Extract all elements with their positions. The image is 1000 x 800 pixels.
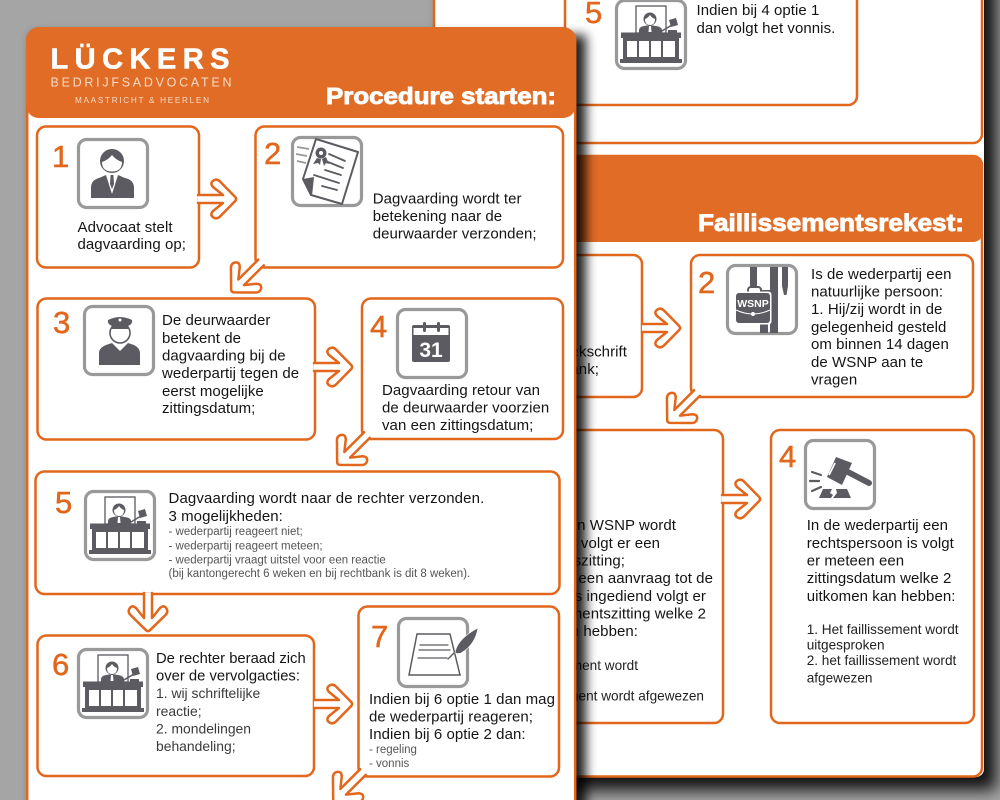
box: rekest step 3: is ingediend volgt er (571, 588, 706, 605)
box: step 7: - regeling (369, 744, 417, 756)
box: step 7 (358, 606, 559, 776)
box: step 5: (bij kantongerecht 6 weken en bij rechtbank is dit 8 weken). (168, 568, 470, 580)
box: step 5: - wederpartij reageert niet; (168, 526, 303, 538)
arrow: 2 to 3 (218, 249, 275, 305)
box: rekest step 2: 1. Hij/zij wordt in de (811, 301, 942, 318)
icon: WSNP briefcase: WSNP (737, 298, 769, 310)
back sheet (433, 0, 984, 777)
icon: gavel (806, 440, 874, 508)
box: step 5: - wederpartij reageert meteen; (168, 540, 323, 552)
box: step 7: Indien bij 6 optie 1 dan mag (369, 691, 555, 708)
box: rekest step 4: 2. het faillissement wordt (807, 653, 957, 668)
box: step 2: deurwaarder verzonden; (373, 225, 537, 242)
icon: judge at bench (616, 0, 686, 68)
box: step 6 (38, 636, 314, 776)
heading: Procedure starten: Procedure starten: (326, 83, 556, 109)
arrow: 3 to 4 (314, 348, 352, 386)
box: step 6: over de vervolgacties: (156, 669, 300, 685)
box: step 6: reactie; (156, 703, 202, 719)
icon: WSNP briefcase (728, 266, 796, 334)
arrow: 7 to next (320, 758, 377, 800)
box: step 5: - wederpartij vraagt uitstel voor een reactie (168, 554, 386, 566)
box: rekest step 4: rechtspersoon is volgt (807, 535, 955, 552)
icon: document with seal (292, 138, 362, 206)
box: step 4: de deurwaarder voorzien (382, 400, 549, 417)
box: step 5: Dagvaarding wordt naar de rechter verzonden. (168, 490, 484, 507)
logo: LÜCKERS (50, 42, 230, 75)
box: rekest step 2: de WSNP aan te (811, 354, 923, 371)
box: step 5: 3 mogelijkheden: (168, 508, 283, 525)
box: step 3: zittingsdatum; (162, 400, 255, 417)
box: step 7: Indien bij 6 optie 2 dan: (369, 726, 526, 743)
box: rekest step 4: uitgesproken (807, 638, 885, 652)
box: step 4: Dagvaarding retour van (382, 382, 540, 399)
arrow: rekest 1 to 2 (642, 309, 680, 347)
box: rekest step 4 (771, 430, 974, 723)
box: rekest step 2: Is de wederpartij een (811, 266, 952, 283)
box: rekest step 3: volgt er een (581, 535, 660, 552)
box: step 6: De rechter beraad zich (156, 651, 306, 667)
box: rekest step 3: een aanvraag tot de (578, 570, 713, 587)
box: rekest step 4: 4 (779, 439, 796, 474)
box: rekest step 1: verzoekschrift (534, 344, 628, 360)
box: step 3: 3 (53, 305, 70, 340)
box: rekest step 2: gelegenheid gesteld (811, 319, 946, 336)
box: step 3: dagvaarding bij de (162, 348, 286, 364)
logo (50, 42, 232, 105)
header band (433, 155, 983, 242)
icon: lawyer (78, 140, 148, 208)
box: step 2: 2 (264, 136, 281, 171)
arrow: rekest 3 to 4 (722, 480, 760, 518)
box: rekest step 3: een WSNP wordt (560, 517, 677, 534)
box: rekest step 1 (470, 255, 642, 397)
box: rekest step 2: 2 (698, 265, 715, 300)
arrow: 6 to 7 (314, 685, 352, 723)
box: rekest step 4: er meteen een (807, 552, 904, 570)
box: step 6: behandeling; (156, 738, 236, 754)
box: step 6: 6 (52, 647, 69, 682)
panel: faillissementsrekest card (433, 155, 983, 776)
icon: calendar (398, 310, 466, 378)
box: step 4: van een zittingsdatum; (382, 417, 533, 434)
box: step 3 (38, 298, 315, 440)
box: step 4: 4 (370, 309, 387, 344)
box: step 7: de wederpartij reageren; (369, 709, 533, 726)
box: step 3: eerst mogelijke (162, 383, 264, 400)
icon: paper and quill (398, 618, 478, 686)
icon: bailiff (84, 306, 154, 374)
panel: procedure starten sheet (26, 27, 576, 800)
box: rekest step 3: 2. het faillissement wordt afgewezen (485, 689, 704, 704)
box: step 6: 1. wij schriftelijke (156, 685, 260, 701)
box: rekest step 1: rechtbank; (528, 361, 599, 378)
box: rekest step 2: om binnen 14 dagen (811, 336, 949, 353)
box: step 2 (256, 126, 563, 268)
icon: judge at bench (78, 650, 148, 718)
sheet shadow: front sheet (33, 35, 586, 800)
box: step 4 (362, 298, 563, 439)
box: step 5 (36, 472, 560, 594)
arrow: 4 to 5 (324, 421, 381, 478)
box: step 1: dagvaarding op; (78, 236, 186, 253)
logo: MAASTRICHT & HEERLEN (75, 96, 209, 105)
box: step 2: betekening naar de (373, 208, 502, 225)
box: rekest step 3: faillissementszitting welke 2 (520, 606, 706, 623)
box: rekest step 4: uitkomen kan hebben: (807, 588, 956, 605)
text: step 5 upper card: dan volgt het vonnis. (696, 20, 835, 37)
box: rekest step 4: 1. Het faillissement wordt (807, 622, 959, 637)
box: rekest step 3: faillissementszitting; (490, 552, 625, 570)
heading: Faillissementsrekest: Faillissementsrekest: (698, 210, 964, 237)
box: step 1: Advocaat stelt (78, 219, 173, 236)
box: rekest step 4: afgewezen (807, 671, 872, 686)
box: step 3: wederpartij tegen de (161, 365, 299, 382)
box: rekest step 3 (470, 430, 723, 723)
arrow: rekest 2 to 3 (654, 379, 711, 436)
icon: judge at bench (86, 492, 154, 560)
box: step 7: - vonnis (369, 758, 410, 770)
box: rekest step 2: vragen (811, 372, 857, 389)
text: step 5 upper card (696, 2, 835, 37)
box: step 5: 5 (55, 485, 72, 520)
box: rekest step 2: natuurlijke persoon: (811, 284, 943, 301)
text: step 5 upper card: Indien bij 4 optie 1 (696, 2, 819, 19)
box: rekest step 2 (691, 255, 973, 397)
box: step 6: 2. mondelingen (156, 720, 251, 736)
header band (26, 27, 576, 118)
arrow: 1 to 2 (198, 180, 236, 218)
panel: upper card step 5 (434, 0, 982, 143)
box: step 7: 7 (371, 619, 388, 654)
arrow: 5 to 6 (129, 593, 167, 631)
sheet shadow: back sheet (445, 0, 996, 790)
box: rekest step 4: In de wederpartij een (807, 517, 948, 534)
box: rekest step 3: 1. Het faillissement wordt (486, 658, 638, 673)
logo: BEDRIJFSADVOCATEN (50, 76, 232, 90)
box: step 3: De deurwaarder (162, 312, 270, 329)
box: step 3: betekent de (162, 330, 241, 347)
box: step 1 (37, 126, 199, 268)
box: step 1: 1 (52, 139, 69, 174)
box: rekest step 3: kan hebben: (555, 623, 638, 640)
box: rekest step 4: zittingsdatum welke 2 (807, 570, 951, 587)
box: step 2: Dagvaarding wordt ter (373, 190, 522, 207)
icon: calendar: 31 (419, 339, 443, 362)
